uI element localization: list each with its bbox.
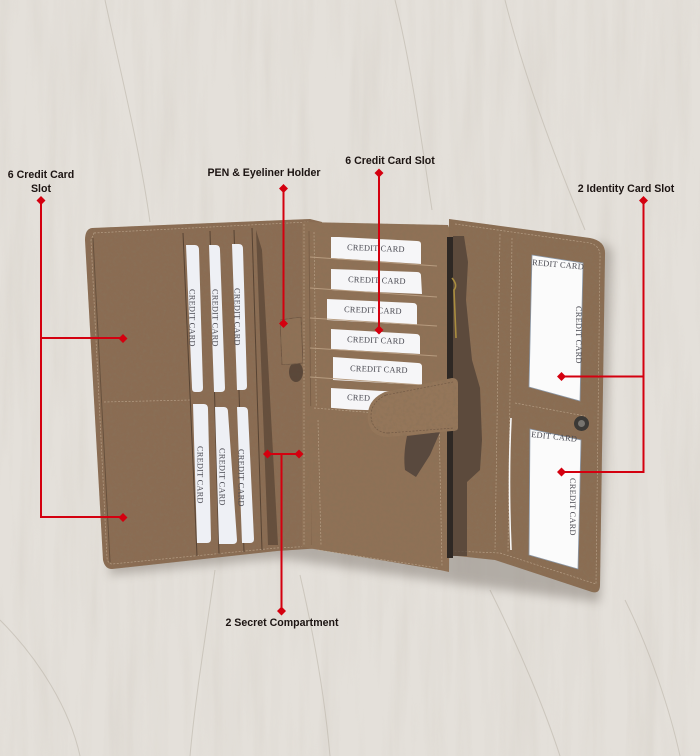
credit card pockets with cards	[310, 237, 437, 411]
identity window: bottom: CREDIT CARD	[568, 478, 577, 536]
credit card pockets with cards: CRED	[347, 393, 370, 403]
credit cards: left column bottom row: CREDIT CARD	[218, 448, 226, 506]
callout: 6 credit card slot centre	[345, 155, 435, 334]
panel: right wallet leaf	[447, 219, 605, 592]
callout: pen and eyeliner holder	[207, 167, 321, 328]
credit cards: left column top row: CREDIT CARD	[210, 289, 220, 347]
panel: centre pockets	[302, 222, 452, 572]
panel: left wallet leaf	[85, 219, 322, 569]
callout: pen and eyeliner holder: PEN & Eyeliner Holder	[207, 167, 321, 179]
credit card pockets with cards: CREDIT CARD	[347, 243, 405, 254]
callout: 2 secret compartment: 2 Secret Compartment	[225, 617, 339, 629]
credit cards: left column top row	[186, 244, 247, 392]
shadow of zip and strap	[453, 236, 482, 556]
callout: 2 secret compartment	[225, 450, 339, 629]
callout: 6 credit card slot centre: 6 Credit Card Slot	[345, 155, 435, 167]
credit card pockets with cards: CREDIT CARD	[350, 364, 408, 375]
callout: 2 identity card slot	[557, 183, 675, 476]
strap shadow	[404, 432, 440, 477]
white slit	[510, 418, 511, 550]
credit cards: left column top row: CREDIT CARD	[188, 289, 196, 347]
credit card pockets with cards: CREDIT CARD	[348, 275, 406, 286]
callout: 6 credit card slot left: Slot	[31, 183, 51, 195]
callout: 2 identity card slot: 2 Identity Card Slot	[578, 183, 675, 195]
credit cards: left column top row: CREDIT CARD	[232, 288, 242, 346]
wallet	[85, 219, 605, 592]
credit card pockets with cards: CREDIT CARD	[344, 305, 402, 316]
identity window: top: CREDIT CARD	[574, 306, 583, 364]
credit cards: left column bottom row	[193, 404, 254, 544]
callout: 6 credit card slot left: 6 Credit Card	[8, 169, 74, 181]
identity window: top	[529, 255, 584, 401]
identity window: bottom	[529, 429, 581, 569]
credit cards: left column bottom row: CREDIT CARD	[196, 446, 204, 504]
identity window: top: REDIT CARD	[532, 258, 584, 272]
wallet drop shadow	[110, 240, 612, 602]
snap button	[574, 416, 589, 431]
credit card pockets with cards: CREDIT CARD	[347, 335, 405, 346]
pen holder loop	[280, 317, 303, 382]
credit cards: left column bottom row: CREDIT CARD	[236, 449, 246, 507]
identity window: bottom: EDIT CARD	[531, 430, 578, 444]
brass zip pull	[452, 278, 456, 338]
snap strap	[368, 378, 458, 437]
lower flat pocket	[309, 406, 445, 570]
callout: 6 credit card slot left	[8, 169, 128, 522]
